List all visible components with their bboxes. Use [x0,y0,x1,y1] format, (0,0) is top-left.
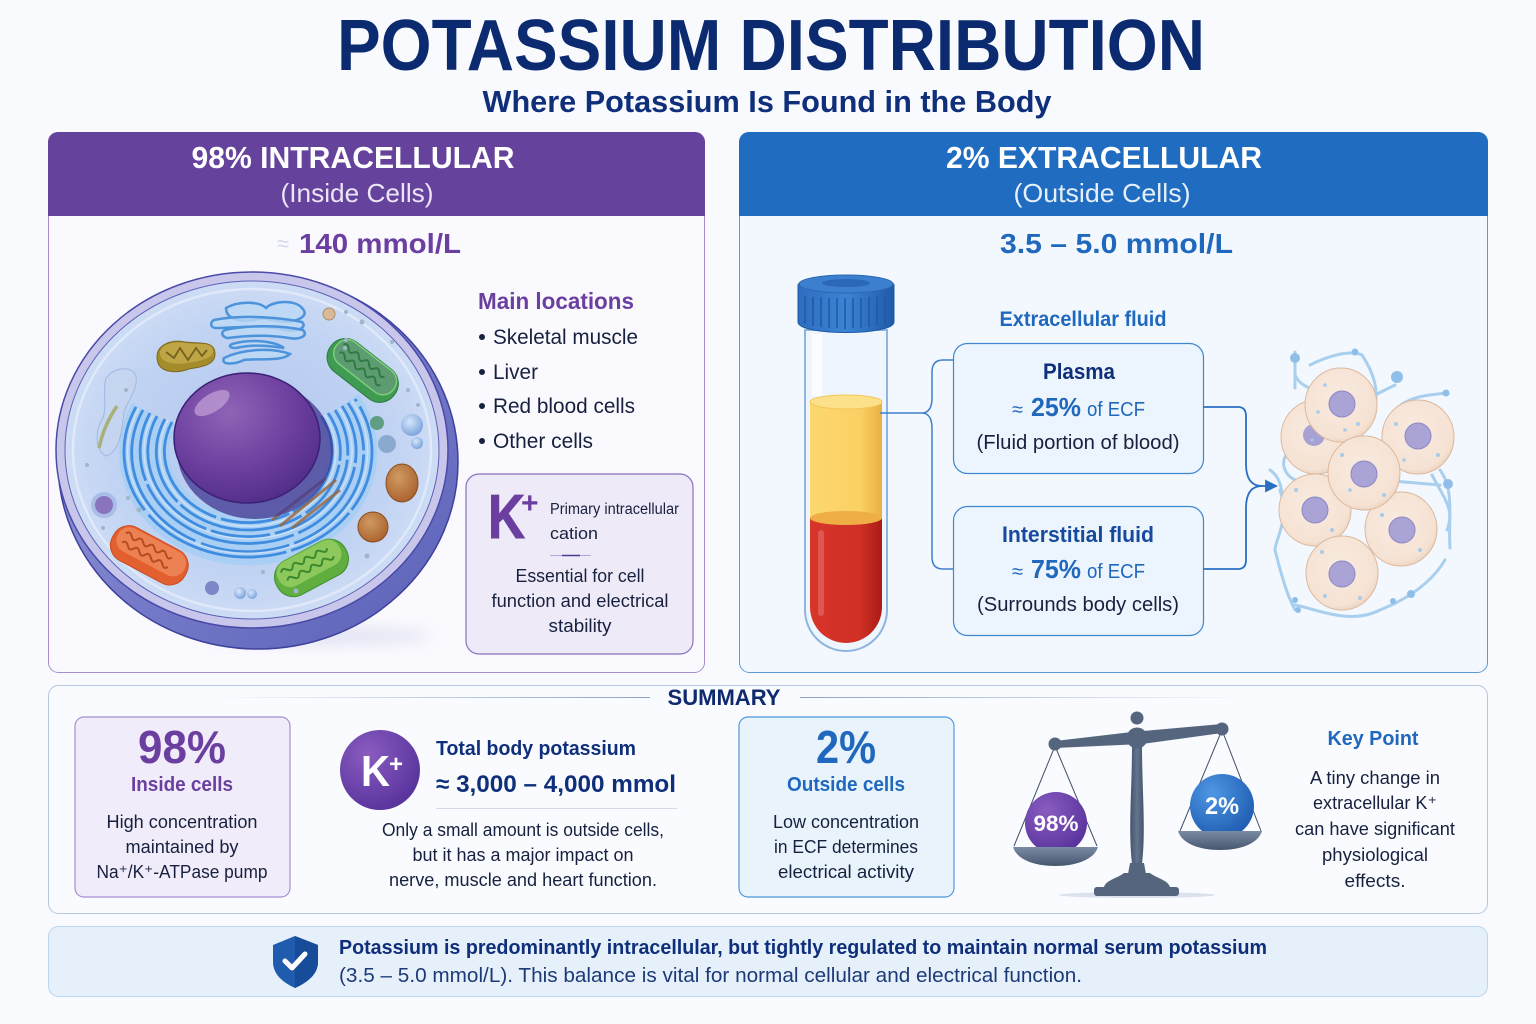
card: inside cells: Inside cells [131,774,233,796]
callout: potassium cation: Essential for cell [516,566,644,586]
box: plasma: Plasma [1043,359,1116,384]
box: plasma: 25% [1031,392,1081,422]
box: interstitial fluid: of ECF [1087,561,1145,583]
box: interstitial fluid: ≈ [1012,561,1023,583]
key point: A tiny change in [1310,768,1440,788]
box: interstitial fluid: (Surrounds body cells) [977,594,1179,616]
card: inside cells: Na⁺/K⁺-ATPase pump [96,862,268,882]
total body potassium [382,738,677,890]
box: plasma: ≈ [1012,399,1023,421]
icon: potassium ion [340,730,420,810]
card: outside cells: Low concentration [773,812,919,832]
box: plasma [954,344,1204,474]
key point: effects. [1344,871,1406,891]
total body potassium: Total body potassium [436,738,636,760]
main locations: Liver [493,361,538,384]
callout: potassium cation: Primary intracellular [550,501,679,518]
weight: 98 percent [1025,792,1087,854]
main locations: Skeletal muscle [493,326,638,349]
interstitial network [1270,352,1450,616]
vesicles and lysosomes [85,308,423,599]
card: inside cells: High concentration [106,812,258,832]
callout: potassium cation: cation [550,524,598,543]
card: outside cells: Outside cells [787,774,905,796]
main locations: Main locations [478,288,634,314]
key point: Key Point [1328,728,1419,750]
panel: summary [48,685,1488,914]
card: inside cells [75,717,290,897]
arrow: fluids to cells [1203,407,1276,569]
banner: takeaway: (3.5 – 5.0 mmol/L). This balance is vital for normal cellular and electrical function. [339,965,1082,987]
callout: potassium cation: stability [548,616,612,636]
weight: 2 percent [1190,774,1254,838]
title: POTASSIUM DISTRIBUTION [337,6,1205,86]
illustration: test tube [798,275,894,651]
key point: physiological [1322,845,1428,865]
card: inside cells: 98% [138,721,226,773]
box: interstitial fluid [954,506,1204,636]
illustration: animal cell [56,272,458,649]
total body potassium: nerve, muscle and heart function. [389,870,657,890]
total body potassium: Only a small amount is outside cells, [382,820,664,840]
intracellular header [48,132,705,216]
total body potassium: but it has a major impact on [412,845,634,865]
callout: potassium cation: + [521,487,539,520]
box: plasma: (Fluid portion of blood) [976,432,1180,454]
key point: extracellular K⁺ [1313,793,1437,813]
subtitle: Where Potassium Is Found in the Body [482,84,1052,119]
icon: potassium ion: K [361,747,390,796]
banner: takeaway: Potassium is predominantly intracellular, but tightly regulated to maintain normal serum potassium [339,936,1267,959]
icon: shield check [273,936,318,988]
box: interstitial fluid: 75% [1031,554,1081,584]
connector: tube to fluid boxes [880,360,953,569]
extracellular header: (Outside Cells) [1014,178,1190,208]
total body potassium: ≈ 3,000 – 4,000 mmol [436,771,676,798]
callout: potassium cation: K [488,483,525,552]
callout: potassium cation: function and electrical [492,591,668,611]
panel: intracellular [48,132,705,672]
endoplasmic reticulum [124,399,372,557]
golgi apparatus [211,302,305,364]
card: outside cells: electrical activity [778,862,914,882]
mitochondrion: orange [104,520,194,591]
callout: potassium cation [466,474,693,654]
main locations [478,288,638,453]
card: inside cells: maintained by [126,837,238,857]
mitochondrion: green top [320,331,406,410]
weight: 2 percent: 2% [1205,793,1239,820]
tube cap [798,275,894,332]
extracellular header: 2% EXTRACELLULAR [946,140,1262,175]
intracellular concentration: ≈ [277,231,289,256]
scale stand [1048,712,1228,896]
card: outside cells: in ECF determines [774,837,918,857]
nucleus [174,373,333,519]
main locations: Other cells [493,430,593,453]
card: outside cells [739,717,954,897]
intracellular header: 98% INTRACELLULAR [192,140,514,175]
box: interstitial fluid: Interstitial fluid [1002,522,1154,547]
panel: extracellular [739,132,1488,672]
extracellular header [739,132,1488,216]
intracellular header: (Inside Cells) [280,178,434,208]
icon: potassium ion: + [389,751,403,778]
illustration: balance scale [1013,712,1262,898]
banner: takeaway [48,926,1488,996]
card: outside cells: 2% [816,721,876,773]
intracellular concentration: 140 mmol/L [299,228,461,259]
box: plasma: of ECF [1087,399,1145,421]
main locations: Red blood cells [493,395,635,418]
summary heading: SUMMARY [668,685,781,710]
mitochondrion: olive [157,341,215,372]
key point [1295,728,1455,891]
extracellular concentration: 3.5 – 5.0 mmol/L [1000,228,1233,259]
weight: 98 percent: 98% [1034,811,1078,836]
extracellular fluid label: Extracellular fluid [1000,308,1166,331]
illustration: body cells [1270,348,1454,616]
key point: can have significant [1295,819,1455,839]
mitochondrion: green bottom [268,533,355,603]
